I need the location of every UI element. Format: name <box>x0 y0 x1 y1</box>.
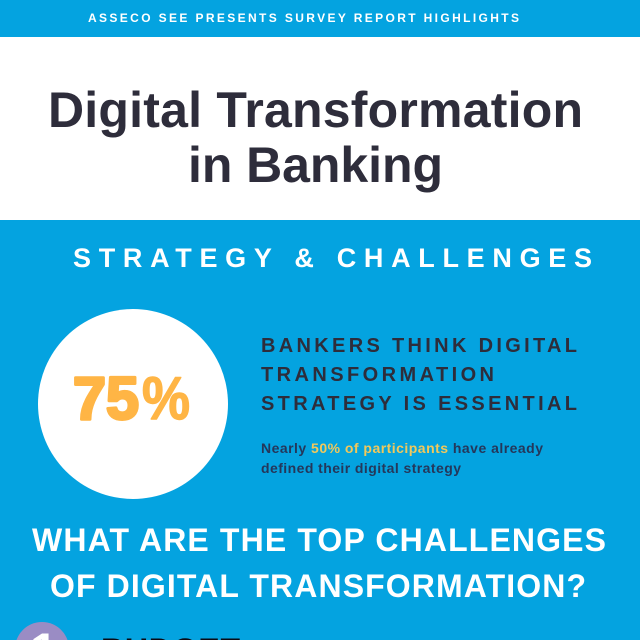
statement heading: BANKERS THINK DIGITAL <box>261 335 577 357</box>
stat value <box>73 365 190 432</box>
supporting text: defined their digital strategy <box>261 460 461 476</box>
title <box>48 82 583 193</box>
title: Digital Transformation <box>48 82 583 138</box>
statement heading: TRANSFORMATION <box>261 364 494 386</box>
supporting text: Nearly 50% of participants have already <box>261 440 543 456</box>
title panel <box>0 37 640 220</box>
stat circle <box>38 309 228 499</box>
section heading: STRATEGY & CHALLENGES <box>73 243 592 273</box>
supporting text <box>261 440 543 476</box>
statement heading <box>261 335 577 415</box>
challenge 1 badge <box>15 622 69 640</box>
question heading: OF DIGITAL TRANSFORMATION? <box>50 568 586 604</box>
stat value: 75 <box>73 365 139 432</box>
stat value: % <box>142 365 190 432</box>
header strip text: ASSECO SEE PRESENTS SURVEY REPORT HIGHLIGHTS <box>88 11 519 25</box>
title: in Banking <box>188 137 443 193</box>
question heading <box>32 522 606 604</box>
statement heading: STRATEGY IS ESSENTIAL <box>261 393 577 415</box>
question heading: WHAT ARE THE TOP CHALLENGES <box>32 522 606 558</box>
